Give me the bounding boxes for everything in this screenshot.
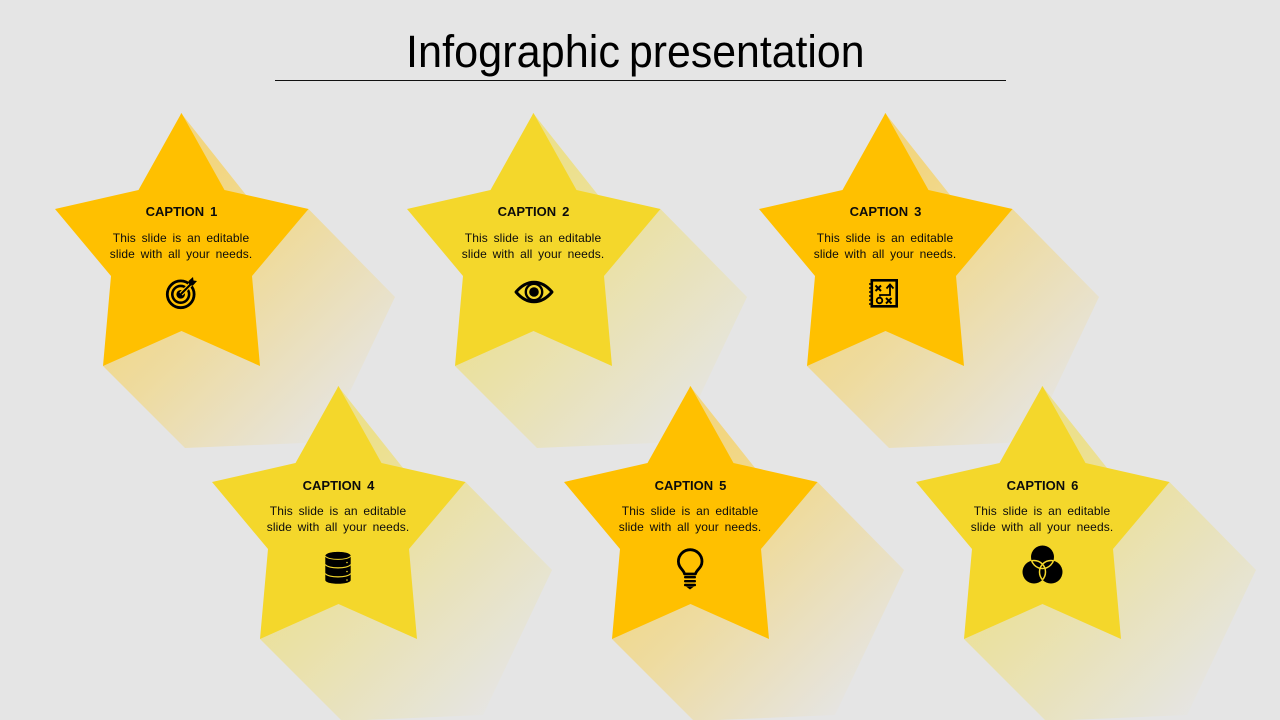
star 5 text: This slide is an editable — [622, 504, 758, 518]
star 2 shadow — [455, 113, 747, 448]
panel: star 5 — [564, 386, 904, 720]
star 4 caption: CAPTION 4 — [303, 478, 375, 493]
star 1 text line 2: slide with all your needs. — [110, 247, 252, 261]
star 5 shadow — [612, 386, 904, 720]
icon: database — [325, 552, 351, 584]
star 3 text: This slide is an editable — [817, 231, 953, 245]
star 2 caption: CAPTION 2 — [498, 204, 569, 219]
star 5 caption: CAPTION 5 — [655, 478, 726, 493]
star 1 text: This slide is an editable — [113, 231, 249, 245]
panel: star 4 — [212, 386, 552, 720]
star 6 shadow — [964, 386, 1256, 720]
panel: star 2 — [407, 113, 747, 448]
panel: star 1 — [55, 113, 395, 448]
star 5 text line 2: slide with all your needs. — [619, 520, 761, 534]
panel: star 6 — [916, 386, 1256, 720]
title: presentation — [629, 26, 864, 77]
icon: light bulb — [678, 550, 702, 590]
star 1 shape — [55, 113, 308, 366]
star 4 text line 2: slide with all your needs. — [267, 520, 409, 534]
icon: strategy notebook — [869, 280, 897, 306]
icon: eye — [516, 282, 552, 302]
star 1 shadow — [103, 113, 395, 448]
panel: star 3 — [759, 113, 1099, 448]
star 6 caption: CAPTION 6 — [1007, 478, 1078, 493]
star 6 shape — [916, 386, 1170, 639]
star 4 shadow — [260, 386, 552, 720]
icon: target with arrow — [167, 277, 197, 308]
icon: venn diagram — [1022, 546, 1062, 584]
star 2 text line 2: slide with all your needs. — [462, 247, 604, 261]
star 6 text line 2: slide with all your needs. — [971, 520, 1113, 534]
star 1 caption: CAPTION 1 — [146, 204, 217, 219]
star 6 text: This slide is an editable — [974, 504, 1110, 518]
star 3 shadow — [807, 113, 1099, 448]
star 5 shape — [564, 386, 818, 639]
title rule — [275, 80, 1006, 81]
star 2 text: This slide is an editable — [465, 231, 601, 245]
star 4 shape — [212, 386, 466, 639]
title — [406, 26, 864, 77]
star 3 shape — [759, 113, 1012, 366]
star 4 text: This slide is an editable — [270, 504, 406, 518]
star 3 text line 2: slide with all your needs. — [814, 247, 956, 261]
star 2 shape — [407, 113, 660, 366]
star 3 caption: CAPTION 3 — [850, 204, 921, 219]
title: Infographic — [406, 26, 620, 77]
